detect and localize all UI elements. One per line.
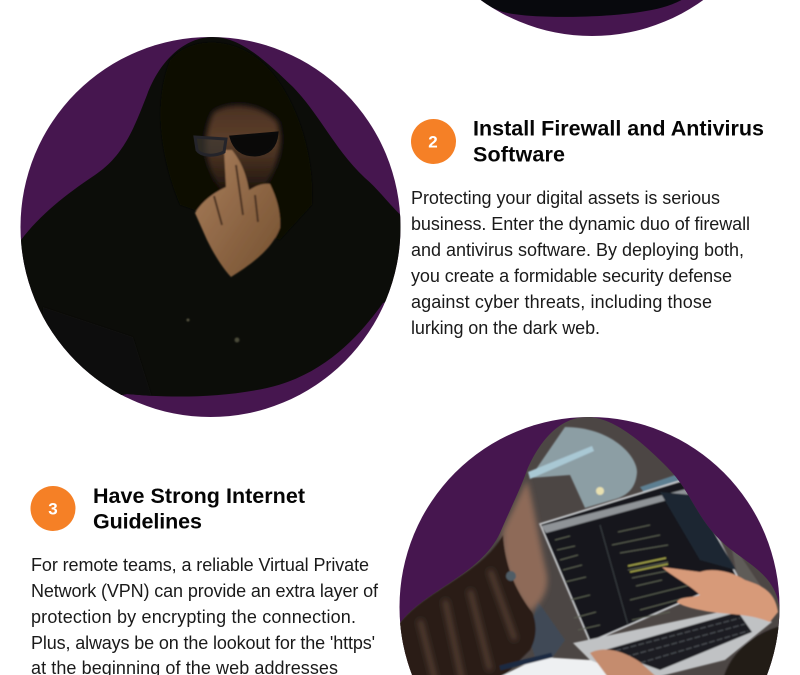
shirt — [500, 656, 608, 675]
glasses — [195, 133, 277, 155]
step 3 body text: Network (VPN) can provide an extra layer of — [31, 581, 379, 601]
step 2 heading: Software — [473, 142, 565, 166]
hacker photo — [21, 37, 400, 396]
pointing hand — [662, 567, 778, 622]
step 2 body text: Protecting your digital assets is serious — [411, 188, 720, 208]
step 2 badge: 2 — [428, 132, 438, 152]
step 3 badge: 3 — [48, 500, 58, 518]
step 2 badge — [411, 119, 456, 164]
step 2 body text — [411, 188, 750, 338]
step 2 body text: lurking on the dark web. — [411, 318, 600, 338]
laptop photo — [390, 410, 800, 675]
step 3 badge — [30, 486, 76, 531]
person at right — [724, 626, 778, 675]
step 2 body text: you create a formidable security defense — [411, 266, 732, 286]
step 3 heading: Have Strong Internet — [93, 484, 305, 508]
step 2 body text: and antivirus software. By deploying both, — [411, 240, 744, 260]
photo circle: laptop and code — [390, 410, 800, 675]
keyboard base — [573, 607, 772, 675]
step 3 heading — [93, 484, 305, 534]
hair and face — [502, 480, 547, 612]
step 3 heading: Guidelines — [93, 510, 202, 534]
step 2 body text: business. Enter the dynamic duo of firewall — [411, 214, 750, 234]
step 2 body text: against cyber threats, including those — [411, 292, 712, 312]
step 3 body text: Plus, always be on the lookout for the 'https' — [31, 633, 375, 653]
photo circle: hooded hacker — [20, 37, 400, 417]
purple circle background — [15, 30, 410, 425]
step 2 heading: Install Firewall and Antivirus — [473, 116, 764, 140]
step 3 body text — [31, 555, 379, 675]
laptop screen — [540, 480, 738, 642]
top photo circle (cropped) — [480, 0, 704, 36]
step 3 body text: For remote teams, a reliable Virtual Private — [31, 555, 369, 575]
step 3 body text: protection by encrypting the connection. — [31, 607, 356, 627]
step 2 heading — [473, 116, 764, 166]
lower hand — [590, 650, 660, 675]
purple circle background — [395, 410, 790, 675]
